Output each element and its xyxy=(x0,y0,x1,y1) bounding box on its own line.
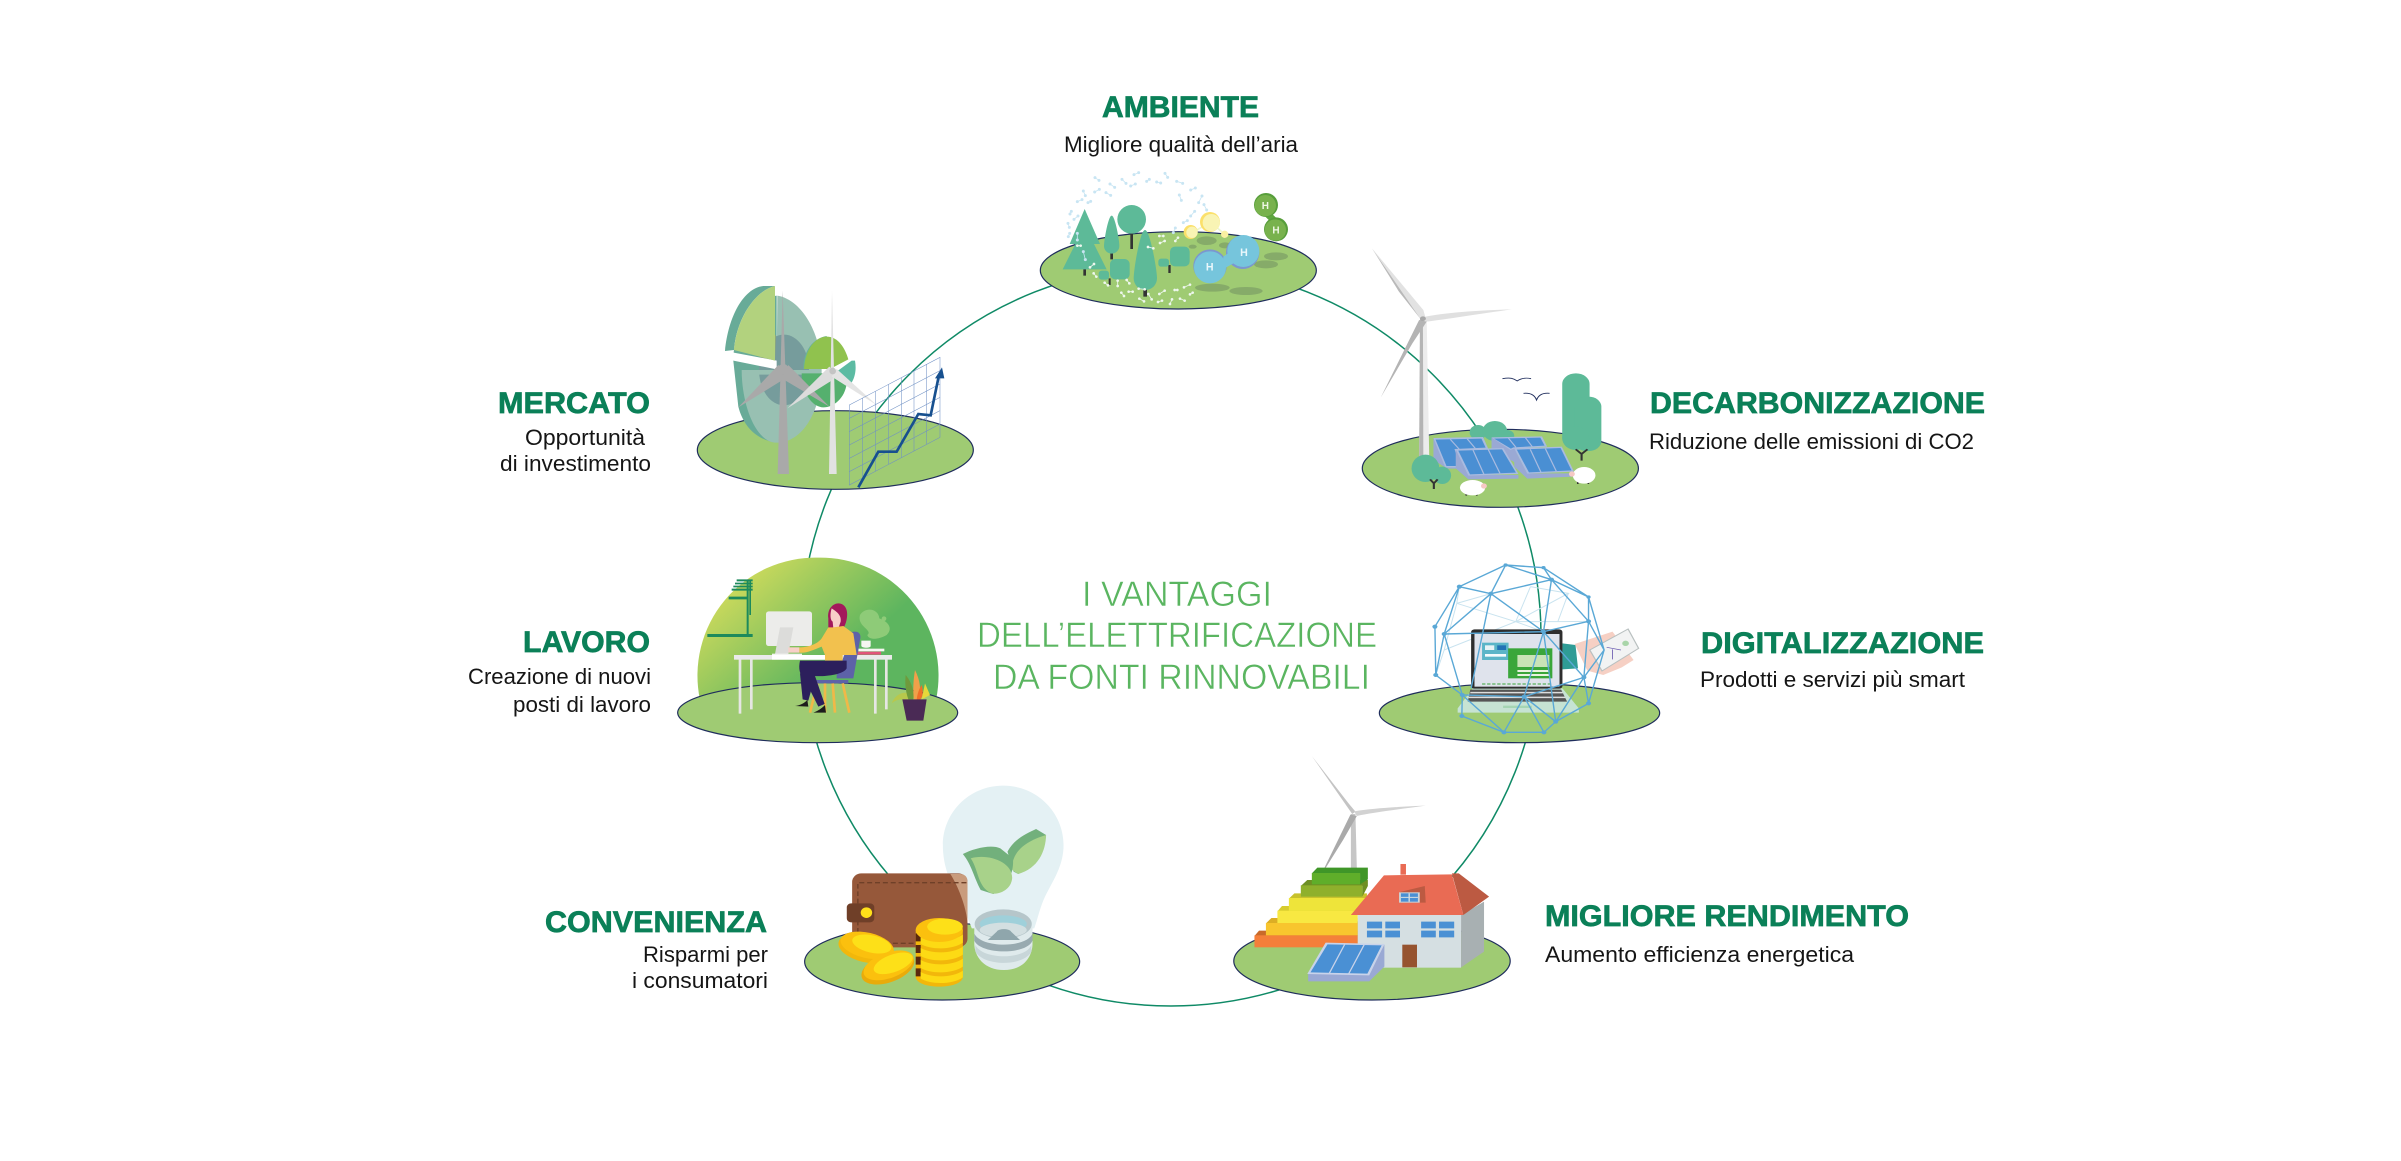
shadows on ground xyxy=(1189,236,1288,295)
house xyxy=(1351,864,1489,968)
white wind turbine xyxy=(787,291,877,474)
steam xyxy=(860,610,890,639)
energy steps xyxy=(1254,868,1368,947)
illustration: decarbonizzazione xyxy=(1362,248,1638,507)
large pie chart xyxy=(725,286,822,443)
panel: mercato text xyxy=(498,387,651,476)
trees xyxy=(1063,205,1190,297)
books and cup xyxy=(854,641,884,655)
sheep xyxy=(1460,467,1595,496)
green molecule: H xyxy=(1272,225,1280,236)
panel: mercato text: Opportunità xyxy=(525,425,645,450)
center title: DA FONTI RINNOVABILI xyxy=(993,657,1370,697)
bushes behind panels xyxy=(1470,421,1514,442)
panel: ambiente text xyxy=(1064,91,1298,157)
panel: mercato text: MERCATO xyxy=(498,387,650,420)
panel: decarbonizzazione text: DECARBONIZZAZIONE xyxy=(1650,387,1985,420)
center title xyxy=(977,574,1377,697)
woman and chair xyxy=(788,603,860,713)
illustration: mercato xyxy=(697,286,973,489)
growth arrow xyxy=(858,367,944,487)
green molecule: H xyxy=(1262,201,1269,212)
grey wind turbine xyxy=(738,291,829,474)
panel: lavoro text: posti di lavoro xyxy=(513,692,651,717)
center title: I VANTAGGI xyxy=(1082,574,1272,614)
blue molecule xyxy=(1193,235,1259,283)
panel: lavoro text xyxy=(468,626,651,717)
panel: digitalizzazione text: Prodotti e servizi più smart xyxy=(1700,667,1966,692)
wallet xyxy=(847,873,967,947)
illustration: lavoro xyxy=(678,558,958,743)
blue molecule: H xyxy=(1206,262,1214,274)
panel: digitalizzazione text: DIGITALIZZAZIONE xyxy=(1701,627,1984,660)
window frame xyxy=(707,579,753,637)
trees xyxy=(1412,373,1601,489)
air particles xyxy=(1068,173,1207,260)
panel: migliore rendimento text: Aumento efficienza energetica xyxy=(1545,942,1854,967)
panel: convenienza text: CONVENIENZA xyxy=(545,906,767,939)
panel: convenienza text: Risparmi per xyxy=(643,942,768,967)
small pie chart xyxy=(802,336,856,407)
desk and monitor xyxy=(734,611,892,714)
panel: migliore rendimento text xyxy=(1545,900,1909,967)
panel: mercato text: di investimento xyxy=(500,451,651,476)
panel: migliore rendimento text: MIGLIORE RENDIMENTO xyxy=(1545,900,1909,933)
panel: lavoro text: Creazione di nuovi xyxy=(468,664,651,689)
gradient dome xyxy=(697,558,939,700)
wind turbine xyxy=(1312,756,1426,878)
coins xyxy=(835,918,963,991)
panel: lavoro text: LAVORO xyxy=(523,626,650,659)
panel: convenienza text: i consumatori xyxy=(632,968,768,993)
solar panels xyxy=(1433,436,1574,479)
light bulb xyxy=(943,786,1064,928)
hand and phone xyxy=(1562,629,1639,675)
illustration: migliore rendimento xyxy=(1234,756,1510,1000)
panel: ambiente text: Migliore qualità dell’aria xyxy=(1064,132,1298,157)
panel: digitalizzazione text xyxy=(1700,627,1984,692)
yellow molecule xyxy=(1184,212,1228,239)
front network xyxy=(1432,563,1604,734)
panel: decarbonizzazione text: Riduzione delle emissioni di CO2 xyxy=(1649,429,1974,454)
birds xyxy=(1502,378,1550,400)
plant xyxy=(892,670,930,721)
illustration: ambiente xyxy=(1040,173,1316,309)
connecting ring xyxy=(801,266,1541,1006)
laptop xyxy=(1458,629,1579,713)
panel: decarbonizzazione text xyxy=(1649,387,1985,454)
solar panel xyxy=(1307,943,1384,981)
panel: convenienza text xyxy=(545,906,768,993)
leaves xyxy=(963,829,1046,894)
illustration: convenienza xyxy=(805,786,1080,1000)
center title: DELL’ELETTRIFICAZIONE xyxy=(977,615,1377,655)
line chart grid xyxy=(849,357,940,485)
green molecule xyxy=(1254,193,1288,241)
back network xyxy=(1436,587,1589,675)
wind turbine xyxy=(1372,248,1512,457)
blue molecule: H xyxy=(1240,247,1248,259)
panel: ambiente text: AMBIENTE xyxy=(1102,91,1259,124)
illustration: digitalizzazione xyxy=(1379,563,1660,743)
bulb socket xyxy=(974,909,1032,970)
